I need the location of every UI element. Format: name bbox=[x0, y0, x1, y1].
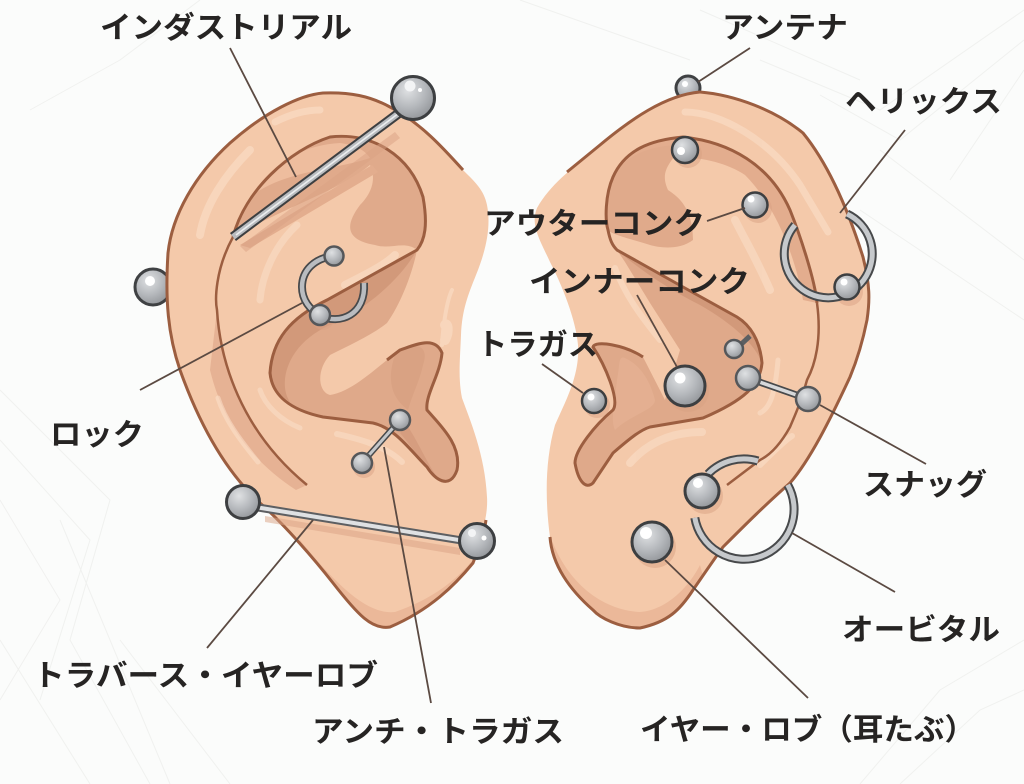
piercing: transverse lobe bar bbox=[226, 486, 494, 558]
label: inner conch: インナーコンク bbox=[529, 266, 750, 299]
highlights bbox=[615, 112, 828, 465]
label: snug: スナッグ bbox=[863, 469, 987, 502]
label: helix: ヘリックス bbox=[845, 86, 1002, 119]
piercing: orbital ring bbox=[685, 459, 794, 559]
piercing: earlobe stud bbox=[632, 522, 672, 562]
label: earlobe: イヤー・ロブ（耳たぶ） bbox=[640, 713, 975, 747]
metal ball: helix back stud behind left ear bbox=[135, 269, 171, 305]
right ear bbox=[535, 76, 869, 640]
piercing: tragus stud bbox=[582, 389, 606, 413]
right ear outline bbox=[550, 92, 869, 628]
left ear fill bbox=[167, 93, 489, 627]
left ear bbox=[135, 93, 500, 640]
piercing: industrial bar bbox=[233, 76, 434, 237]
label: antenna: アンテナ bbox=[722, 12, 848, 45]
leader lines bbox=[140, 48, 926, 703]
left ear inner contour lines bbox=[216, 136, 458, 485]
label: transverse lobe: トラバース・イヤーロブ bbox=[33, 659, 378, 693]
piercing: outer conch stud bbox=[742, 192, 768, 218]
right ear top-left contour bbox=[567, 92, 700, 172]
piercing: small barbell end near snug bbox=[725, 336, 750, 358]
right ear shading bbox=[540, 112, 828, 640]
label: outer conch: アウターコンク bbox=[484, 208, 705, 241]
label: industrial: インダストリアル bbox=[100, 11, 352, 45]
right ear inner contour lines bbox=[575, 137, 819, 485]
left ear outline bbox=[167, 93, 486, 627]
piercing: anti-tragus barbell bbox=[352, 410, 410, 473]
label: anti-tragus: アンチ・トラガス bbox=[312, 716, 564, 749]
label: tragus: トラガス bbox=[477, 329, 598, 362]
piercing: inner conch stud bbox=[665, 366, 705, 406]
piercing: snug barbell bbox=[736, 366, 820, 411]
piercing: helix ring bbox=[784, 214, 872, 300]
piercing: helix stud inside bbox=[672, 137, 698, 163]
label: rook: ロック bbox=[50, 419, 144, 452]
left ear shading bbox=[200, 110, 500, 640]
piercing shadows on skin bbox=[240, 132, 863, 568]
right ear fill bbox=[535, 92, 869, 628]
metal ball: antenna stud behind right ear bbox=[676, 76, 700, 100]
piercing: rook curved barbell bbox=[302, 246, 364, 325]
label: orbital: オービタル bbox=[842, 614, 1000, 647]
highlights bbox=[200, 110, 452, 462]
